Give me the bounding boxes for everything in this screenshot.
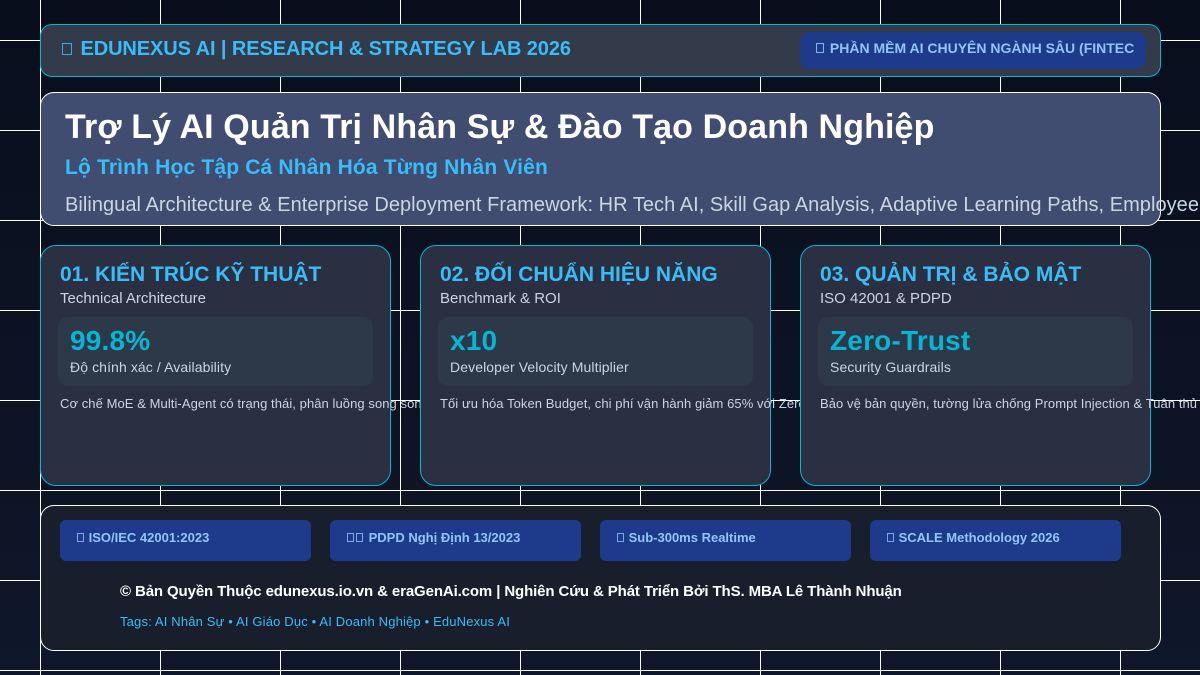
card 02 heading: 02. ĐỐI CHUẨN HIỆU NĂNG	[440, 263, 718, 286]
panel: card 01 technical architecture	[40, 245, 391, 486]
panel: hero	[40, 92, 1161, 226]
card 02 subheading: Benchmark & ROI	[440, 290, 561, 307]
card 01 description: Cơ chế MoE & Multi-Agent có trạng thái, phân luồng song song	[60, 396, 429, 411]
description: Bilingual Architecture & Enterprise Deployment Framework: HR Tech AI, Skill Gap Analysis, Adaptive Learning Paths, Employee	[65, 194, 1199, 216]
metric label: Độ chính xác / Availability	[70, 359, 231, 375]
header badge	[800, 32, 1146, 69]
card 01 metric	[58, 317, 373, 386]
badge: ISO	[60, 520, 311, 561]
card 03 subheading: ISO 42001 & PDPD	[820, 290, 952, 307]
metric value: x10	[450, 325, 497, 356]
metric label: Developer Velocity Multiplier	[450, 359, 629, 375]
metric label: Security Guardrails	[830, 359, 951, 375]
badge: PDPD: PDPD Nghị Định 13/2023	[369, 530, 520, 545]
copyright line: © Bản Quyền Thuộc edunexus.io.vn & eraGenAi.com | Nghiên Cứu & Phát Triển Bởi ThS. MBA Lê Thành Nhuận	[120, 583, 902, 600]
panel: card 02 benchmark	[420, 245, 771, 486]
header badge: PHẦN MỀM AI CHUYÊN NGÀNH SÂU (FINTEC	[830, 40, 1134, 56]
badge: SCALE: SCALE Methodology 2026	[899, 530, 1060, 545]
card 02 metric	[438, 317, 753, 386]
card 01 heading: 01. KIẾN TRÚC KỸ THUẬT	[60, 263, 321, 286]
badge: PDPD	[330, 520, 581, 561]
metric value: Zero-Trust	[830, 325, 970, 356]
panel: top header bar	[40, 24, 1161, 77]
header brand title: EDUNEXUS AI | RESEARCH & STRATEGY LAB 2026	[80, 38, 571, 60]
card 03 heading: 03. QUẢN TRỊ & BẢO MẬT	[820, 263, 1081, 286]
badge: SCALE	[870, 520, 1121, 561]
card 01 subheading: Technical Architecture	[60, 290, 206, 307]
subtitle: Lộ Trình Học Tập Cá Nhân Hóa Từng Nhân Viên	[65, 156, 548, 179]
badge: realtime: Sub-300ms Realtime	[629, 530, 756, 545]
panel: card 03 governance	[800, 245, 1151, 486]
card 03 metric	[818, 317, 1133, 386]
card 02 description: Tối ưu hóa Token Budget, chi phí vận hành giảm 65% với Zero-Copy	[440, 396, 841, 411]
panel: footer	[40, 505, 1161, 651]
tags line: Tags: AI Nhân Sự • AI Giáo Dục • AI Doanh Nghiệp • EduNexus AI	[120, 614, 510, 629]
badge: realtime	[600, 520, 851, 561]
main title: Trợ Lý AI Quản Trị Nhân Sự & Đào Tạo Doanh Nghiệp	[65, 108, 934, 146]
badge: ISO: ISO/IEC 42001:2023	[89, 530, 209, 545]
card 03 description: Bảo vệ bản quyền, tường lửa chống Prompt Injection & Tuân thủ	[820, 396, 1197, 411]
metric value: 99.8%	[70, 325, 150, 356]
